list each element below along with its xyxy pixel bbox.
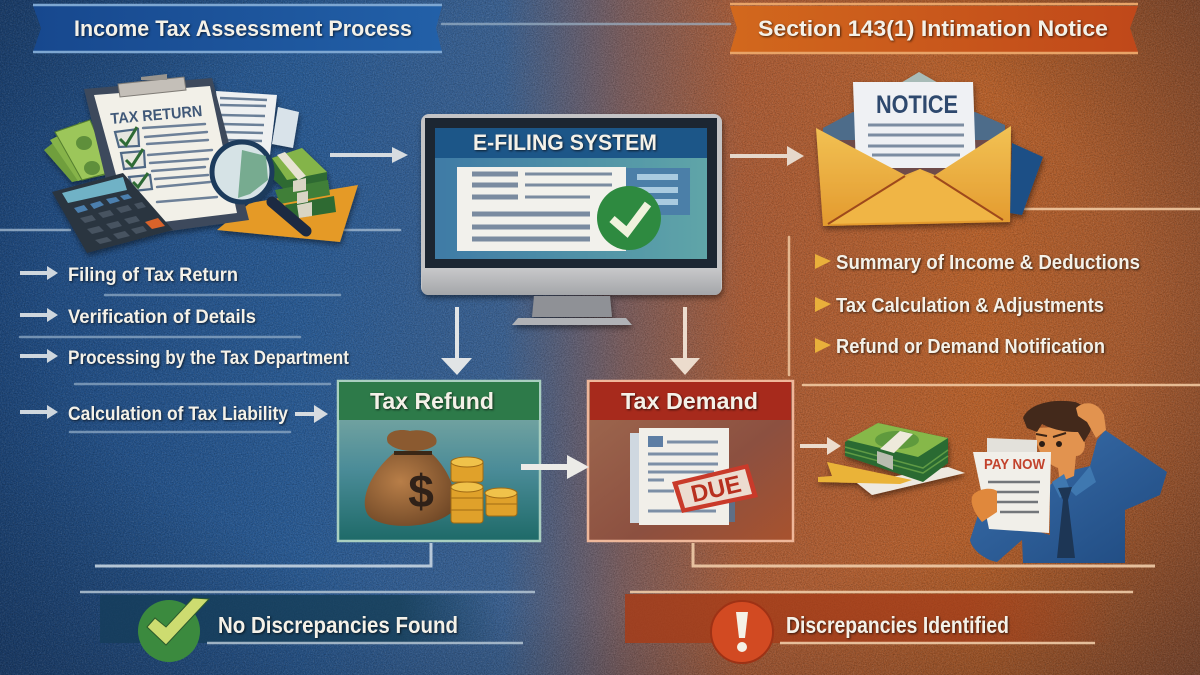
step: calculation: Calculation of Tax Liability [68,403,288,425]
icon: cash stacks [272,148,336,219]
item: refund or demand: Refund or Demand Notification [836,336,1105,358]
banner: Income Tax Assessment Process: Income Tax Assessment Process [74,16,412,41]
outcome: no discrepancies found: No Discrepancies Found [218,612,458,638]
icon: clipboard: TAX RETURN [110,103,203,128]
icon: orange folder [217,185,358,242]
arrow: to notice [730,146,804,166]
banner: Section 143(1) Intimation Notice [730,4,1138,53]
outcome: discrepancies identified [625,592,1133,663]
icon: coins [451,457,517,523]
monitor: e-filing system [421,114,722,325]
step: processing: Processing by the Tax Department [68,347,349,369]
panel: tax demand [588,381,793,541]
arrow: down to demand [670,307,700,375]
icon: magnifying glass [212,142,306,231]
illustration: worried man with pay now notice [970,401,1167,563]
arrow: refund to demand [521,455,589,479]
neck and face [1036,426,1085,482]
arrow: demand to cash [800,437,841,455]
icon: money bag: $ [408,465,434,517]
step: verification: Verification of Details [68,306,256,328]
banner: Income Tax Assessment Process [33,5,442,52]
outcome: discrepancies identified: Discrepancies Identified [786,612,1009,638]
icon: document with due stamp [630,428,758,525]
icon: cash fan [44,120,112,182]
notice letter [853,82,976,168]
icon: back papers [216,91,299,155]
connector: refund bracket [95,543,431,566]
icon: calculator [52,173,173,253]
illustration: notice envelope [816,72,1043,226]
step: filing: Filing of Tax Return [68,264,238,286]
hand on head [1076,403,1106,438]
decorative rules [0,24,1200,432]
list: process steps [20,264,349,425]
illustration: tax return documents [44,74,358,253]
arrow: down to refund [441,307,472,375]
monitor: e-filing system: E-FILING SYSTEM [473,130,657,155]
hand [972,489,997,522]
collar and tie [1052,466,1096,558]
notice letter: NOTICE [876,91,958,119]
illustration: worried man with pay now notice: PAY NOW [984,456,1046,473]
banner: Section 143(1) Intimation Notice: Section 143(1) Intimation Notice [758,16,1108,41]
icon: clipboard [84,74,249,238]
icon: green check [597,186,661,250]
arrow: liability to refund [295,405,328,423]
panel: tax refund: Tax Refund [370,388,494,414]
notice paper [987,438,1037,456]
outcome: no discrepancies found [80,592,535,662]
shirt [970,430,1167,563]
eyes [1036,433,1066,447]
list: notice contents [815,252,1140,358]
panel: tax refund [338,381,540,541]
arrow: to e-filing [330,147,408,163]
panel: tax demand: Tax Demand [621,388,758,414]
item: summary: Summary of Income & Deductions [836,252,1140,274]
item: calculation: Tax Calculation & Adjustments [836,295,1104,317]
icon: cash with papers [818,423,965,495]
connector: demand bracket [693,543,1155,566]
envelope body [816,126,1011,226]
icon: money bag [365,430,454,526]
icon: document with due stamp: DUE [688,471,744,508]
hair [1023,401,1091,442]
